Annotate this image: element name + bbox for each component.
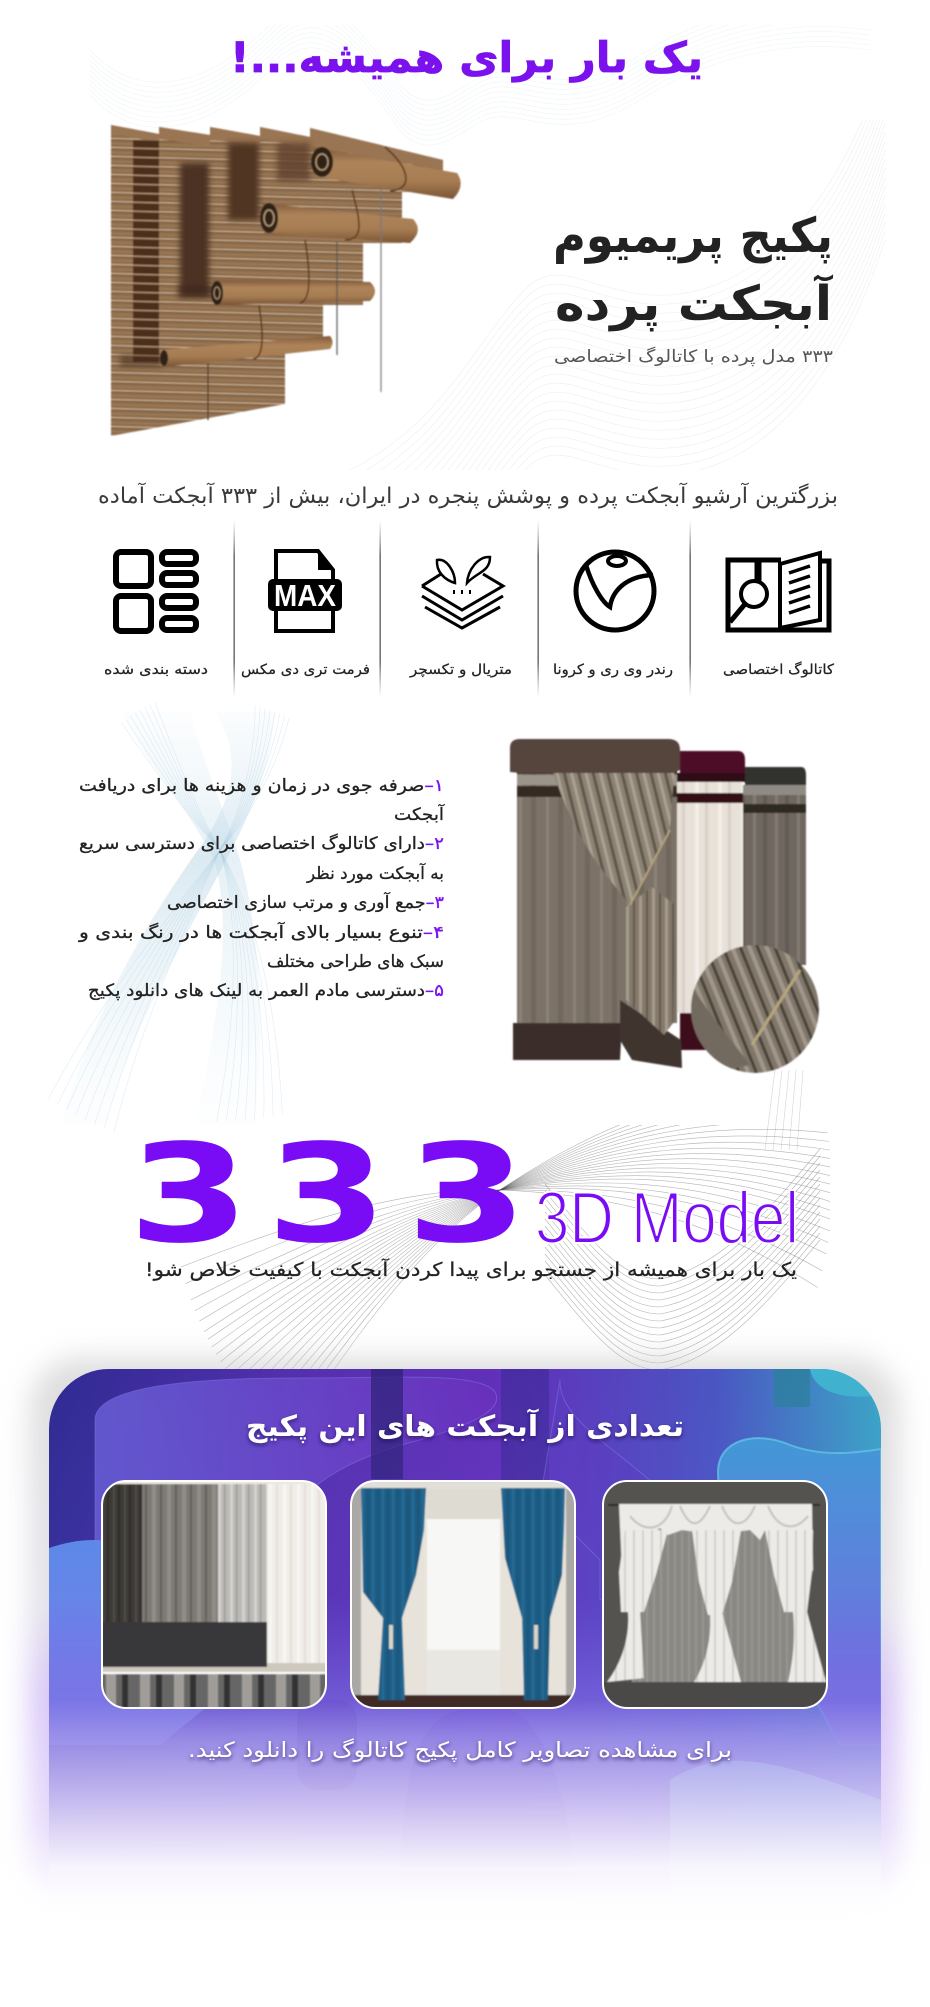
item 2: ۲–دارای کاتالوگ اختصاصی برای دسترسی سریع [79, 833, 444, 854]
detail circle [680, 945, 819, 1080]
bamboo roller blinds image [111, 125, 461, 436]
card title: تعدادی از آبجکت های این پکیج [246, 1408, 684, 1444]
blinds: rolled slats [313, 147, 461, 199]
blinds: slatted panels [111, 125, 443, 436]
item 5: ۵–دسترسی مادم العمر به لینک های دانلود پکیج [88, 981, 444, 1001]
icon: render logo [576, 552, 654, 630]
feature dividers [234, 520, 691, 697]
front curtain: taupe with pelmet [510, 739, 682, 1068]
back curtain: dark [743, 767, 806, 965]
big number 333: 333 [128, 1115, 527, 1273]
feature: exclusive catalog [723, 553, 834, 678]
label: فرمت تری دی مکس [241, 662, 370, 678]
item 1 continuation: آبجکت [394, 803, 445, 825]
heading line 2: آبجکت پرده [555, 274, 834, 332]
tagline: یک بار برای همیشه از جستجو برای پیدا کردن آبجکت با کیفیت خلاص شو! [145, 1257, 797, 1281]
benefits list [78, 776, 445, 1001]
label: رندر وی ری و کرونا [553, 662, 673, 678]
card glow [30, 1358, 900, 1903]
icon: open book with magnifier [728, 553, 829, 630]
main title: یک بار برای همیشه...! [230, 33, 703, 83]
item 3: ۳–جمع آوری و مرتب سازی اختصاصی [167, 891, 444, 913]
icon: grid list [116, 552, 196, 631]
icon: MAX file: MAX [274, 578, 336, 613]
3D Model label: 3D Model [535, 1178, 799, 1259]
label: کاتالوگ اختصاصی [723, 660, 834, 678]
heading line 1: پکیج پریمیوم [553, 208, 833, 264]
feature: material and texture [409, 557, 512, 678]
feature: 3ds max format [241, 551, 370, 678]
heading: premium package [553, 208, 834, 367]
item 2 continuation: به آبجکت مورد نظر [306, 862, 444, 884]
label: دسته بندی شده [104, 662, 208, 678]
icon: layered sheets with leaves [422, 557, 503, 628]
item 1: ۱–صرفه جوی در زمان و هزینه ها برای دریافت [79, 776, 444, 796]
feature: categorized [104, 552, 208, 678]
subheading: بزرگترین آرشیو آبجکت پرده و پوشش پنجره در ایران، بیش از ۳۳۳ آبجکت آماده [98, 482, 838, 509]
blinds: cords [385, 147, 406, 191]
card background and ribbons [49, 1369, 881, 1910]
label: متریال و تکسچر [409, 662, 512, 678]
photo: white swag curtain [603, 1481, 827, 1708]
heading subtitle: ۳۳۳ مدل پرده با کاتالوگ اختصاصی [554, 346, 833, 367]
middle curtain: maroon and white [677, 751, 745, 1050]
photo: blue curtain with sheer [351, 1481, 575, 1708]
photo: dark and white curtain [102, 1481, 326, 1708]
card caption: برای مشاهده تصاویر کامل پکیج کاتالوگ را دانلود کنید. [188, 1738, 732, 1762]
feature: v-ray and corona render [553, 552, 673, 678]
panel: sample objects card [49, 1369, 881, 1910]
item 4 continuation: سبک های طراحی مختلف [267, 952, 444, 972]
item 4: ۴–تنوع بسیار بالای آبجکت ها در رنگ بندی و [78, 921, 444, 943]
curtain product image [510, 739, 819, 1080]
